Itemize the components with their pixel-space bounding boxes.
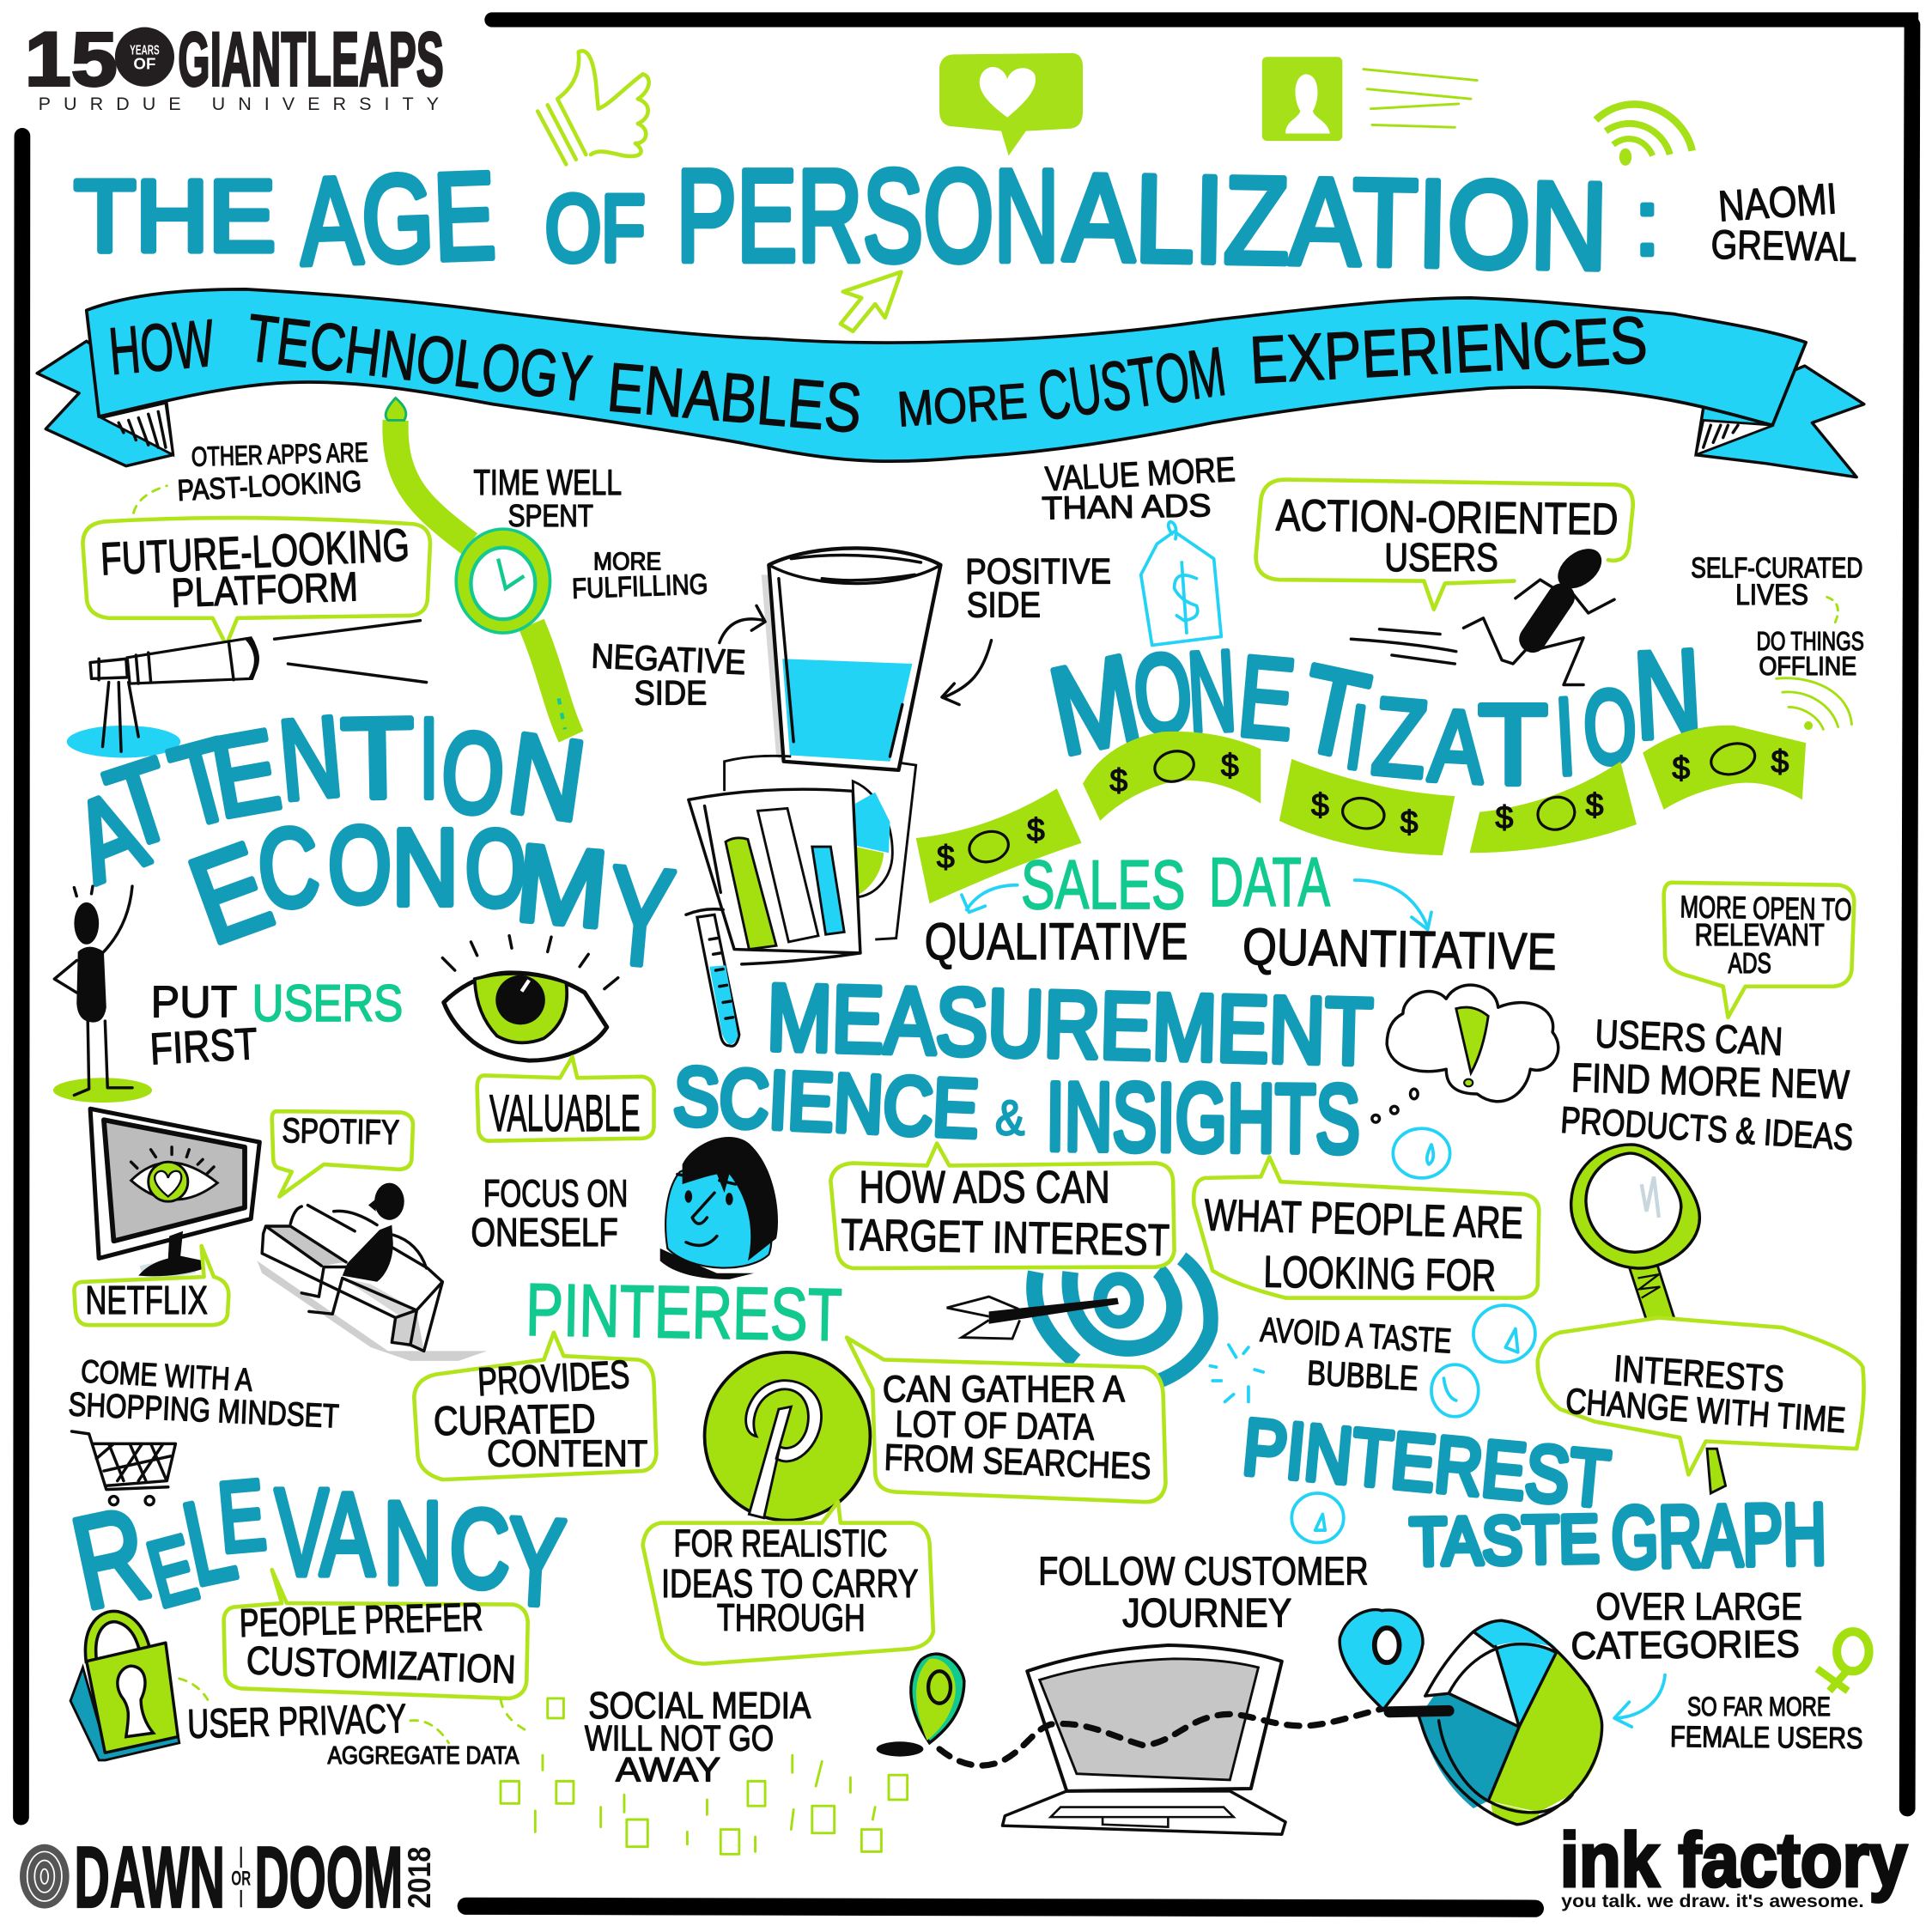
text: avoid a taste bubble: BUBBLE [1306, 1353, 1419, 1398]
callout: provides curated content: CONTENT [487, 1433, 647, 1474]
speaker name: NAOMI [1716, 173, 1838, 231]
heading: attention economy: O [465, 809, 526, 930]
callout: provides curated content: CURATED [434, 1396, 596, 1444]
text: so far more female users [1670, 1691, 1863, 1755]
icon: person on couch [257, 1183, 487, 1361]
money bills [916, 726, 1806, 903]
heading: monetization: O [1581, 668, 1639, 787]
banner ribbon: EXPERIENCES [1248, 303, 1649, 398]
callout: future-looking platform [82, 518, 430, 645]
text: so far more female users: FEMALE USERS [1670, 1721, 1863, 1755]
logo: 150 years of giant leaps: PURDUE UNIVERSITY [39, 93, 439, 114]
heading: attention economy: N [274, 692, 347, 824]
heading: attention economy: E [203, 707, 289, 842]
icon: glass half full [762, 548, 940, 770]
heading: pinterest taste graph: GRAPH [1611, 1486, 1827, 1586]
dashed journey path [939, 1708, 1384, 1765]
heading: monetization: T [1479, 682, 1547, 809]
text: positive side: POSITIVE [965, 550, 1111, 591]
callout: spotify: SPOTIFY [282, 1111, 400, 1152]
title: : [1634, 171, 1660, 276]
text: quantitative: QUANTITATIVE [1242, 917, 1557, 981]
callout: people prefer customization: CUSTOMIZATION [246, 1637, 517, 1692]
note: more fulfilling: MORE [593, 549, 661, 576]
heading: relevancy: R [61, 1480, 160, 1637]
money bills: $ [1221, 747, 1239, 783]
heading: monetization: O [1128, 630, 1198, 759]
callout: valuable [477, 1057, 654, 1142]
logo: 150 years of giant leaps: 15 [25, 15, 118, 101]
text: put users first [149, 974, 403, 1073]
note: do things offline [1757, 628, 1864, 681]
callout: provides curated content: PROVIDES [477, 1352, 630, 1404]
callout: how ads can target interest [830, 1144, 1175, 1268]
note: other apps are past-looking [177, 436, 368, 507]
icon: pie chart and blue pin [1340, 1610, 1602, 1825]
callout: for realistic ideas [643, 1502, 933, 1664]
heading: monetization: N [1631, 623, 1704, 765]
text: user privacy: USER PRIVACY [187, 1696, 407, 1747]
heading: pinterest taste graph: PINTEREST [1239, 1402, 1613, 1524]
heading: relevancy: V [275, 1463, 328, 1601]
callout: people prefer customization [224, 1570, 528, 1698]
heading: attention economy: T [94, 735, 189, 873]
callout: action-oriented users: ACTION-ORIENTED [1275, 490, 1619, 544]
icon: cursor arrow [841, 272, 901, 331]
money bills: $ [937, 839, 955, 875]
text: negative side: NEGATIVE [591, 636, 746, 682]
text: qualitative: QUALITATIVE [925, 912, 1188, 970]
dashed connector [1827, 597, 1838, 624]
arrow: categories [1614, 1675, 1665, 1727]
callout: more open to relevant ads: RELEVANT [1695, 917, 1825, 952]
text: sales data with arrows: SALES [1021, 847, 1186, 924]
heading: monetization: N [1185, 627, 1239, 756]
heading: attention economy: A [58, 766, 161, 907]
heading: relevancy: A [320, 1469, 375, 1601]
text: over large categories: CATEGORIES [1571, 1624, 1800, 1668]
text: avoid a taste bubble [1259, 1310, 1453, 1398]
heading: attention economy: M [512, 821, 612, 951]
callout: action-oriented users: USERS [1384, 535, 1498, 580]
callout: for realistic ideas: THROUGH [717, 1597, 866, 1639]
icon: profile card [1262, 57, 1477, 141]
dashed connector [179, 1679, 449, 1743]
callout: how ads can target interest: TARGET INTEREST [841, 1209, 1170, 1265]
note: time well spent: SPENT [508, 498, 593, 533]
heading: science and insights: INSIGHTS [1046, 1062, 1360, 1173]
callout: spotify [272, 1111, 413, 1196]
speaker name: GREWAL [1710, 222, 1857, 270]
text: negative side: SIDE [634, 674, 707, 713]
icon: test tube [686, 909, 739, 1046]
heading: attention economy: E [173, 817, 287, 970]
text: aggregate data: AGGREGATE DATA [327, 1742, 519, 1770]
banner ribbon [37, 289, 1864, 477]
heading: attention economy: N [501, 708, 592, 845]
icon: heart speech bubble [939, 53, 1083, 155]
text: sales data with arrows: DATA [1209, 844, 1330, 921]
callout: can gather a lot of data [847, 1338, 1165, 1502]
heading: measurement: MEASUREMENT [766, 965, 1374, 1084]
logo: 150 years of giant leaps: OF [133, 55, 155, 73]
text: focus on oneself [471, 1173, 628, 1255]
callout: can gather a lot of data: FROM SEARCHES [884, 1437, 1151, 1487]
note: more fulfilling: FULFILLING [571, 568, 708, 605]
heading: monetization: M [1039, 629, 1151, 781]
callout: netflix [74, 1246, 228, 1325]
heading: attention economy: O [328, 805, 392, 926]
logo: dawn or doom 2018: DOOM [255, 1830, 403, 1926]
heading: attention economy: O [439, 709, 507, 839]
text: social media will not go away [585, 1686, 811, 1789]
dashed connector [133, 486, 167, 513]
text: social media will not go away: WILL NOT GO [585, 1717, 774, 1758]
icon: laptop [1002, 1645, 1285, 1834]
icon: monitor with heart eye [90, 1109, 259, 1278]
banner ribbon: CUSTOM [1034, 333, 1230, 435]
callout: what people are looking for: LOOKING FOR [1263, 1247, 1497, 1300]
text: users can find more new products: USERS CAN [1595, 1011, 1783, 1064]
text: users can find more new products: FIND MORE NEW [1571, 1055, 1850, 1109]
heading: attention economy: I [419, 696, 439, 823]
note: value more than ads: THAN ADS [1042, 487, 1212, 526]
text: focus on oneself: FOCUS ON [483, 1173, 628, 1215]
text: follow customer journey [1038, 1548, 1369, 1636]
text: social media will not go away: AWAY [616, 1750, 720, 1789]
icon: magnifying glass [1571, 1145, 1726, 1493]
title: AGE [298, 146, 498, 291]
text: over large categories [1571, 1586, 1802, 1668]
heading: attention economy: C [253, 804, 324, 933]
text: social media will not go away: SOCIAL MEDIA [588, 1686, 811, 1727]
icon: wifi signal [1595, 104, 1692, 166]
money bills: $ [1027, 811, 1045, 848]
heading: relevancy: N [383, 1478, 442, 1609]
note: more fulfilling [571, 549, 708, 605]
callout: future-looking platform: FUTURE-LOOKING [100, 519, 410, 585]
logo: ink factory: you talk. we draw. it's awesome. [1561, 1890, 1864, 1911]
money bills: $ [1496, 799, 1514, 835]
heading: monetization: Z [1368, 676, 1431, 801]
text: follow customer journey: JOURNEY [1122, 1590, 1291, 1636]
scattered small squares [501, 1698, 908, 1854]
heading: relevancy: E [138, 1516, 207, 1627]
money bills: $ [1586, 787, 1604, 823]
heading: science and insights: SCIENCE [671, 1051, 981, 1155]
text: come with a shopping mindset: COME WITH A [80, 1352, 253, 1398]
callout: future-looking platform: PLATFORM [171, 564, 359, 617]
title: ALIZATION [1062, 148, 1609, 295]
heading: relevancy: Y [504, 1492, 568, 1633]
heading: monetization [1039, 623, 1704, 809]
money bills: $ [1400, 804, 1419, 840]
dashed connector [278, 1662, 532, 1733]
logo: 150 years of giant leaps: GIANTLEAPS [178, 15, 444, 101]
heading: monetization: I [1553, 676, 1577, 799]
text: put users first: USERS [252, 974, 403, 1032]
logo: dawn or doom 2018: DAWN [74, 1830, 225, 1926]
text: focus on oneself: ONESELF [471, 1210, 618, 1255]
text: negative side [591, 636, 746, 713]
text: come with a shopping mindset [68, 1352, 340, 1436]
callout: interests change with time [1538, 1318, 1864, 1474]
title: THE [74, 160, 276, 273]
callout: more open to relevant ads: ADS [1728, 948, 1771, 980]
logo: dawn or doom 2018: 2018 [401, 1847, 437, 1909]
heading: monetization: E [1234, 633, 1299, 763]
icon: target with dart [947, 1258, 1211, 1384]
logo: dawn or doom 2018 [20, 1830, 437, 1926]
icon: stick figure raising arm [53, 886, 152, 1103]
icon: pinterest logo [705, 1352, 870, 1521]
note: time well spent: TIME WELL [473, 462, 622, 502]
note: do things offline: DO THINGS [1757, 628, 1864, 656]
text: sales data with arrows [962, 844, 1431, 930]
text: users can find more new products: PRODUCTS & IDEAS [1559, 1100, 1855, 1158]
icon: watch [386, 398, 571, 737]
callout: action-oriented users [1256, 480, 1633, 610]
money bills: $ [1109, 762, 1127, 798]
logo: 150 years of giant leaps: YEARS [130, 43, 160, 58]
icon: running figure [1351, 541, 1614, 685]
note: value more than ads [1042, 450, 1236, 526]
heading: pinterest taste graph [1239, 1402, 1827, 1586]
title [74, 143, 1660, 295]
note: self-curated lives [1691, 552, 1862, 611]
money bills: $ [1311, 787, 1329, 823]
note: do things offline: OFFLINE [1759, 653, 1856, 681]
callout: valuable: VALUABLE [489, 1084, 641, 1142]
callout: interests change with time: CHANGE WITH TIME [1564, 1380, 1847, 1440]
icon: eye [442, 936, 618, 1060]
text: positive side: SIDE [967, 584, 1041, 624]
note: value more than ads: VALUE MORE [1044, 450, 1236, 498]
heading: attention economy [58, 692, 679, 997]
heading: attention economy: T [159, 714, 246, 852]
icon: price tag [1141, 521, 1221, 645]
speaker name [1710, 173, 1857, 270]
text: avoid a taste bubble: AVOID A TASTE [1259, 1310, 1453, 1361]
heading: attention economy: T [340, 694, 415, 823]
icon: taste bubbles [1210, 1128, 1535, 1543]
icon: thought cloud with exclamation [1372, 985, 1558, 1122]
heading: science and insights: & [995, 1091, 1024, 1145]
heading: science and insights [671, 1051, 1360, 1173]
text: so far more female users: SO FAR MORE [1687, 1691, 1831, 1722]
icon: padlock [70, 1617, 179, 1760]
icon: female symbol [1817, 1631, 1869, 1691]
heading: monetization: T [1289, 639, 1379, 785]
callout: what people are looking for: WHAT PEOPLE ARE [1204, 1189, 1524, 1248]
text: put users first: FIRST [149, 1018, 258, 1073]
logo: dawn or doom 2018: OR [231, 1867, 251, 1890]
heading: monetization: I [1341, 687, 1372, 787]
heading: relevancy: E [214, 1460, 270, 1574]
note: self-curated lives: LIVES [1735, 579, 1808, 611]
text: over large categories: OVER LARGE [1595, 1586, 1802, 1628]
icon: charts and papers [689, 756, 916, 964]
heading: attention economy: N [392, 807, 459, 928]
text: positive side [965, 550, 1111, 624]
arrow: positive side [942, 641, 992, 705]
heading: pinterest taste graph: TASTE [1409, 1503, 1600, 1579]
banner ribbon: ENABLES [605, 349, 865, 448]
note: other apps are past-looking: PAST-LOOKING [177, 465, 362, 507]
title: OF [545, 177, 645, 282]
callout: more open to relevant ads: MORE OPEN TO [1680, 889, 1852, 927]
banner ribbon: MORE [896, 374, 1029, 438]
icon: thumbs up [538, 51, 649, 164]
arrow: negative side [720, 605, 765, 643]
title: PERSON [676, 143, 1060, 289]
text: users can find more new products [1559, 1011, 1855, 1158]
callout: people prefer customization: PEOPLE PREFER [239, 1595, 483, 1645]
callout: can gather a lot of data: CAN GATHER A [883, 1369, 1125, 1410]
heading: relevancy [61, 1460, 568, 1637]
icon: telescope on tripod [67, 621, 427, 757]
callout: interests change with time: INTERESTS [1613, 1348, 1785, 1400]
callout: can gather a lot of data: LOT OF DATA [895, 1404, 1095, 1449]
callout: netflix: NETFLIX [85, 1278, 208, 1322]
callout: provides curated content [414, 1333, 656, 1479]
heading: attention economy: Y [602, 837, 679, 997]
note: self-curated lives: SELF-CURATED [1691, 552, 1862, 584]
banner ribbon: HOW [106, 307, 217, 389]
heading: relevancy: C [449, 1487, 510, 1612]
note: other apps are past-looking: OTHER APPS ARE [191, 436, 368, 472]
logo: 150 years of giant leaps [25, 15, 444, 114]
icon: lime location pin [877, 1654, 964, 1757]
text: put users first: PUT [151, 977, 237, 1027]
callout: for realistic ideas: FOR REALISTIC [674, 1522, 888, 1564]
heading: monetization: A [1427, 688, 1487, 805]
callout: how ads can target interest: HOW ADS CAN [859, 1163, 1110, 1213]
money bills: $ [1672, 750, 1690, 786]
icon: shopping cart [71, 1431, 175, 1505]
icon: small wifi [1777, 678, 1851, 729]
banner ribbon: TECHNOLOGY [243, 301, 596, 416]
heading: relevancy: L [173, 1473, 246, 1611]
text: follow customer journey: FOLLOW CUSTOMER [1038, 1548, 1369, 1593]
callout: for realistic ideas: IDEAS TO CARRY [661, 1561, 919, 1606]
callout: what people are looking for [1194, 1157, 1539, 1300]
icon: blue face with black hair [660, 1137, 778, 1279]
note: time well spent [473, 462, 622, 533]
heading: pinterest: PINTEREST [525, 1269, 843, 1357]
money bills: $ [1771, 744, 1789, 780]
text: come with a shopping mindset: SHOPPING MINDSET [68, 1386, 340, 1436]
callout: more open to relevant ads [1664, 883, 1854, 1018]
